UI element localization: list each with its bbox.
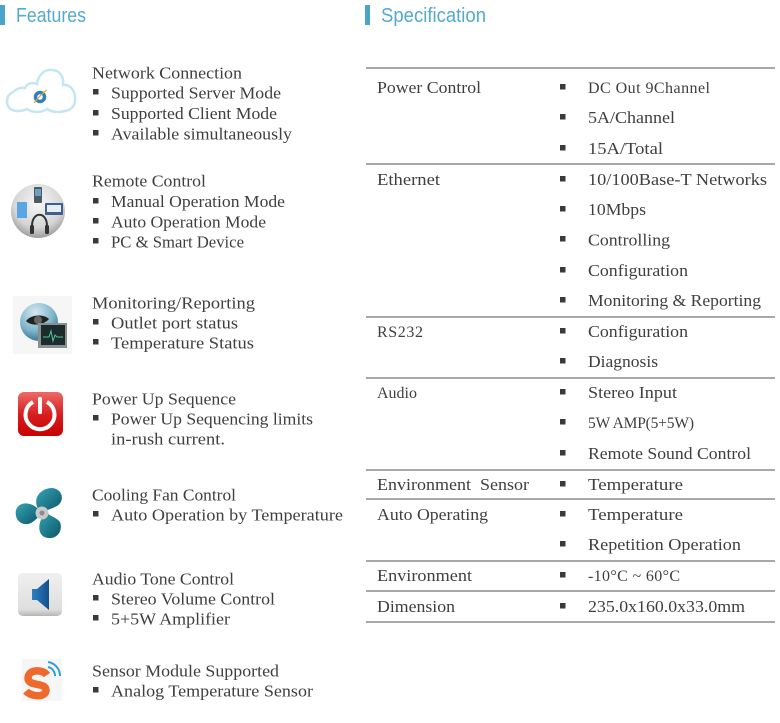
text: remote control list: Manual Operation Mode bbox=[111, 192, 285, 211]
icon: orange S with signal arcs bbox=[22, 659, 62, 701]
heading: features: Features bbox=[16, 5, 86, 27]
text: network connection list: Available simultaneously bbox=[111, 124, 293, 144]
row: ethernet: 10Mbps bbox=[588, 200, 646, 219]
text: network connection list: Supported Client Mode bbox=[111, 104, 277, 123]
text: remote control list: Auto Operation Mode bbox=[111, 212, 266, 232]
text: network connection list: Network Connection bbox=[92, 64, 243, 82]
row: rs232: RS232 bbox=[377, 324, 423, 341]
text: sensor module list: Analog Temperature Sensor bbox=[111, 682, 313, 700]
row: auto operating: Temperature bbox=[588, 505, 683, 524]
icon: eye with monitor bbox=[13, 296, 72, 354]
text: network connection list: Supported Server Mode bbox=[111, 84, 281, 102]
row: auto operating: Repetition Operation bbox=[588, 535, 742, 554]
row: environment bbox=[377, 566, 680, 585]
heading: specification: Specification bbox=[381, 5, 486, 27]
row: rs232: Diagnosis bbox=[588, 352, 658, 371]
icon: speaker key bbox=[18, 573, 62, 616]
text: monitoring list: Temperature Status bbox=[111, 334, 254, 352]
panel: specification bbox=[365, 5, 775, 623]
row: ethernet: Ethernet bbox=[377, 170, 440, 189]
row: dimension bbox=[377, 597, 745, 616]
row: power control: Power Control bbox=[377, 78, 481, 97]
text: remote control list bbox=[92, 172, 285, 252]
text: audio tone list: Audio Tone Control bbox=[92, 570, 234, 588]
icon: red power button bbox=[18, 392, 63, 436]
text: power up list bbox=[92, 390, 313, 448]
feature: power up sequence bbox=[18, 390, 313, 448]
row: ethernet: Monitoring & Reporting bbox=[588, 291, 762, 310]
row: audio: Audio bbox=[377, 385, 417, 402]
feature: monitoring and reporting bbox=[13, 294, 256, 354]
feature: remote control bbox=[11, 172, 285, 252]
text: cooling fan list: Auto Operation by Temperature bbox=[111, 506, 343, 524]
row: environment sensor: Environment Sensor bbox=[377, 475, 529, 494]
icon: cloud with browser logo bbox=[7, 70, 75, 112]
feature: audio tone control bbox=[18, 570, 275, 628]
row: auto operating bbox=[377, 505, 742, 554]
text: remote control list: Remote Control bbox=[92, 172, 206, 190]
row: audio: 5W AMP(5+5W) bbox=[588, 415, 694, 432]
text: sensor module list bbox=[92, 662, 313, 700]
row: power control: DC Out 9Channel bbox=[588, 80, 711, 97]
text: network connection list bbox=[92, 64, 293, 144]
row: dimension: 235.0x160.0x33.0mm bbox=[588, 597, 745, 616]
text: sensor module list: Sensor Module Supported bbox=[92, 662, 280, 680]
row: ethernet: Configuration bbox=[588, 261, 689, 280]
row: ethernet: Controlling bbox=[588, 230, 671, 250]
row: ethernet: 10/100Base-T Networks bbox=[588, 170, 767, 189]
row: environment sensor: Temperature bbox=[588, 475, 683, 494]
row: audio bbox=[377, 383, 751, 463]
icon: teal fan bbox=[16, 488, 62, 538]
row: environment: -10°C ~ 60°C bbox=[588, 568, 680, 585]
icon: devices on silver ball bbox=[11, 184, 65, 238]
row: environment: Environment bbox=[377, 566, 472, 585]
row: rs232: Configuration bbox=[588, 322, 689, 341]
row: ethernet bbox=[377, 170, 767, 310]
text: audio tone list: Stereo Volume Control bbox=[111, 590, 275, 608]
row: audio: Stereo Input bbox=[588, 383, 677, 402]
text: monitoring list bbox=[92, 294, 256, 352]
row: power control: 5A/Channel bbox=[588, 108, 675, 127]
row: environment sensor bbox=[377, 475, 683, 494]
panel: features bbox=[0, 5, 343, 701]
text: monitoring list: Monitoring/Reporting bbox=[92, 294, 256, 312]
row: rs232 bbox=[377, 322, 689, 371]
row: audio: Remote Sound Control bbox=[588, 444, 751, 463]
feature: cooling fan control bbox=[16, 486, 343, 538]
text: power up list: in-rush current. bbox=[111, 430, 225, 448]
text: cooling fan list bbox=[92, 486, 343, 524]
text: audio tone list: 5+5W Amplifier bbox=[111, 610, 230, 628]
text: monitoring list: Outlet port status bbox=[111, 314, 238, 332]
feature: sensor module bbox=[22, 659, 313, 701]
row: power control: 15A/Total bbox=[588, 139, 663, 158]
text: remote control list: PC & Smart Device bbox=[111, 232, 244, 252]
feature: network connection bbox=[7, 64, 293, 144]
row: power control bbox=[377, 78, 711, 158]
row: dimension: Dimension bbox=[377, 597, 456, 616]
text: cooling fan list: Cooling Fan Control bbox=[92, 486, 236, 504]
text: power up list: Power Up Sequence bbox=[92, 390, 236, 408]
row: auto operating: Auto Operating bbox=[377, 505, 489, 524]
text: audio tone list bbox=[92, 570, 275, 628]
text: power up list: Power Up Sequencing limits bbox=[111, 410, 313, 428]
